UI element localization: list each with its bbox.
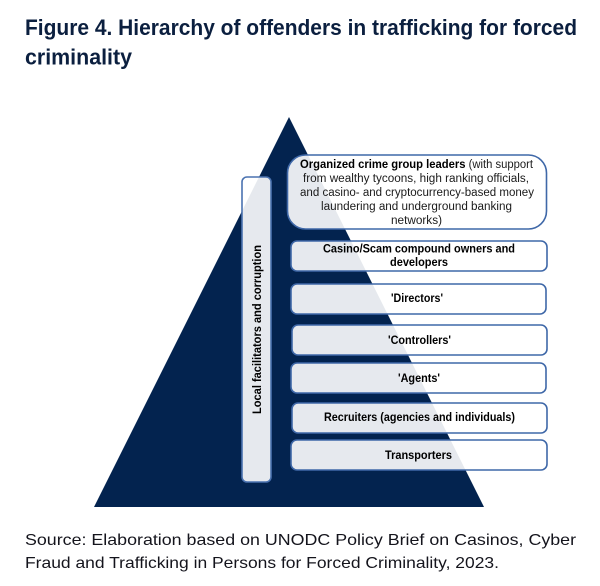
- tier: agents: 'Agents': [398, 373, 440, 385]
- tier: transporters: Transporters: [385, 450, 452, 462]
- tier: directors: [291, 284, 546, 314]
- tier: organized crime group leaders: from wealthy tycoons, high ranking officials,: [303, 173, 529, 185]
- tier: controllers: [292, 325, 547, 355]
- source note: [25, 532, 577, 572]
- tier: organized crime group leaders: and casino- and cryptocurrency-based money: [300, 187, 534, 199]
- tier: casino/scam compound owners: Casino/Scam compound owners and: [323, 244, 515, 256]
- title: criminality: [25, 44, 133, 70]
- panel: local facilitators and corruption: Local facilitators and corruption: [252, 245, 264, 414]
- tier: recruiters: Recruiters (agencies and individuals): [324, 412, 515, 424]
- tier: organized crime group leaders: Organized crime group leaders (with support: [300, 159, 534, 171]
- title: [25, 15, 577, 70]
- tier: agents: [291, 363, 546, 393]
- tier: recruiters: [292, 403, 547, 433]
- tier: transporters: [291, 440, 547, 470]
- tier: casino/scam compound owners: developers: [390, 257, 448, 269]
- pyramid triangle: [94, 117, 484, 507]
- source note: Source: Elaboration based on UNODC Policy Brief on Casinos, Cyber: [25, 532, 577, 549]
- source note: Fraud and Trafficking in Persons for Forced Criminality, 2023.: [25, 555, 499, 572]
- panel: local facilitators and corruption: [242, 177, 271, 482]
- tier: directors: 'Directors': [391, 293, 443, 305]
- tier: organized crime group leaders: networks): [391, 215, 442, 227]
- title: Figure 4. Hierarchy of offenders in trafficking for forced: [25, 15, 577, 40]
- tier: organized crime group leaders: [288, 155, 546, 229]
- tier: controllers: 'Controllers': [388, 335, 451, 347]
- tier: casino/scam compound owners: [291, 241, 547, 271]
- tier: organized crime group leaders: laundering and underground banking: [321, 201, 512, 213]
